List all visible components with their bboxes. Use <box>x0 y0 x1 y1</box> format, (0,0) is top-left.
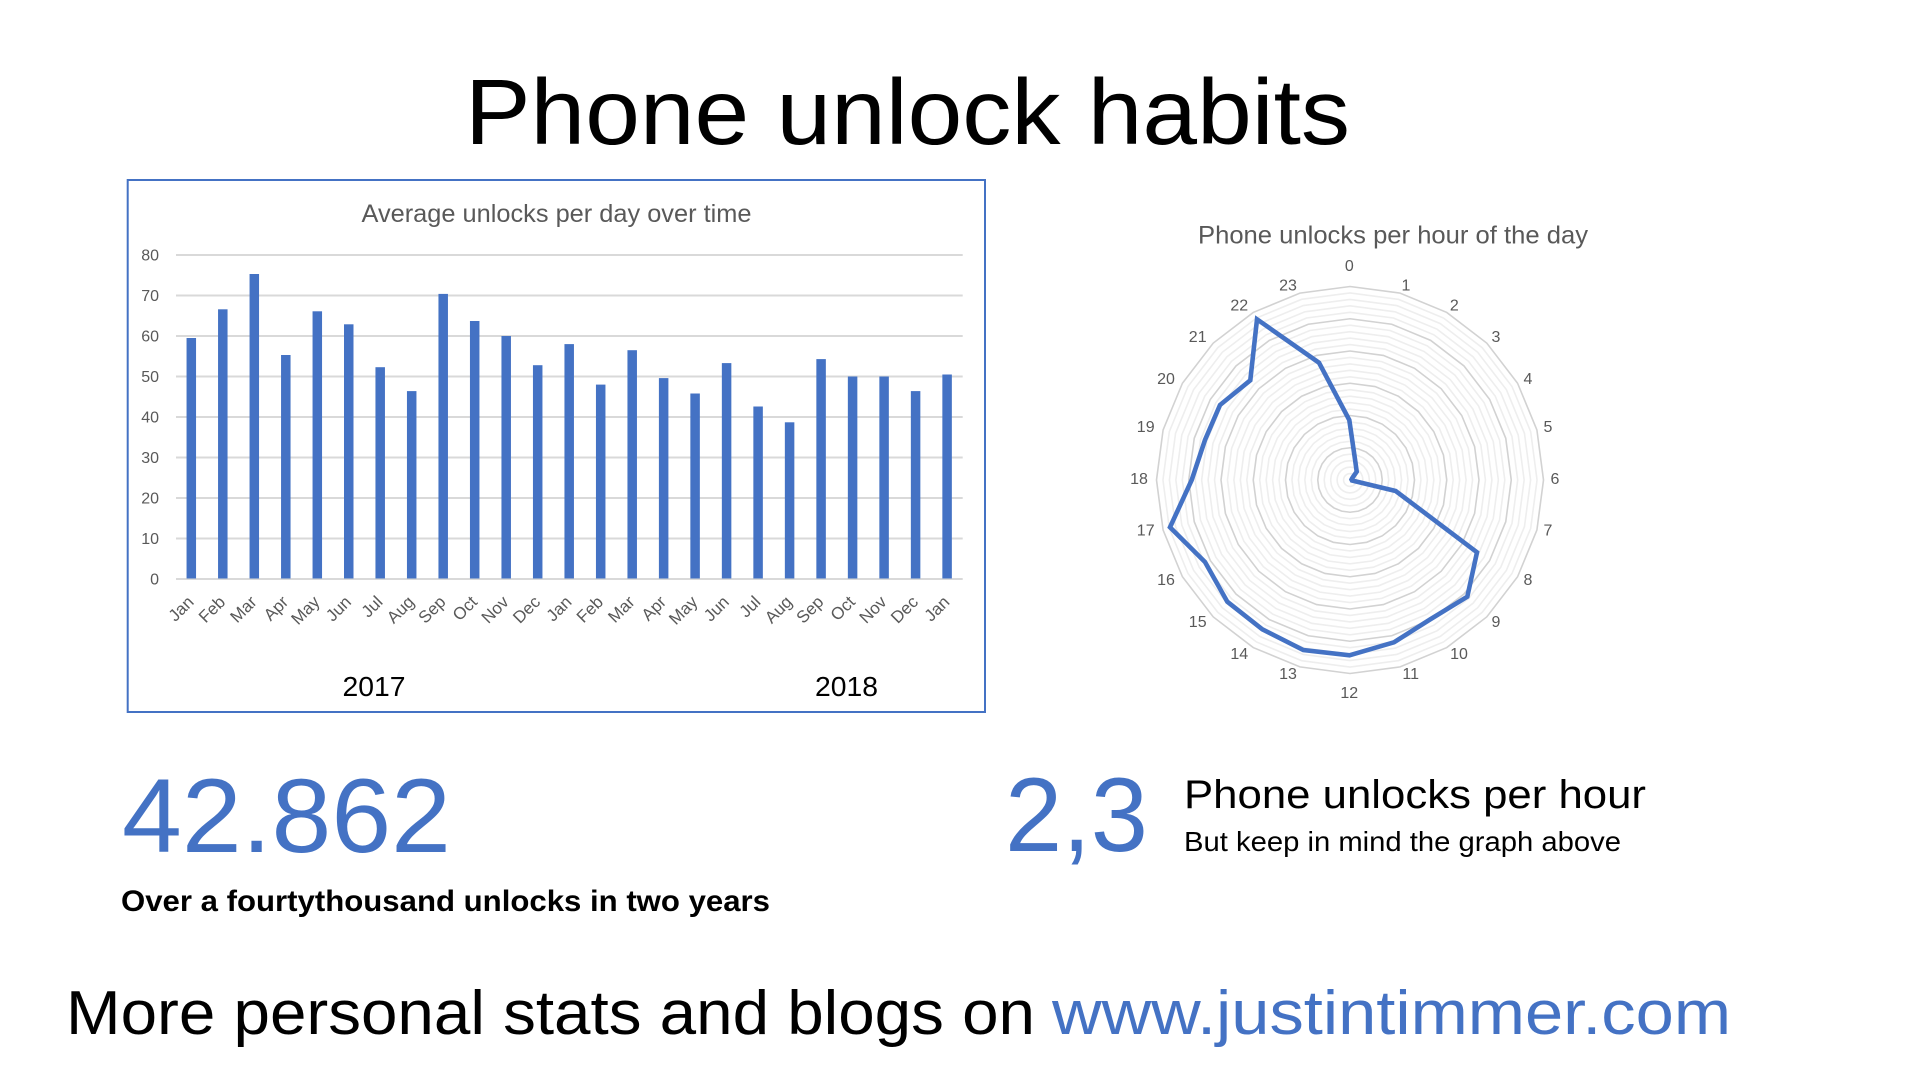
panel: average unlocks per day bar chart <box>128 180 985 712</box>
month labels: Sep <box>793 592 827 627</box>
big stat: total unlocks <box>121 758 770 918</box>
hour labels: 21 <box>1189 329 1207 346</box>
month labels: May <box>665 592 702 629</box>
month labels: Jan <box>165 592 198 625</box>
footer call to action <box>66 979 1731 1048</box>
y axis labels: 0 <box>150 572 159 588</box>
month labels: Nov <box>856 592 891 627</box>
month labels: Jan <box>921 592 953 625</box>
monthly bars <box>187 274 952 578</box>
month labels: Aug <box>761 592 796 627</box>
month labels: Dec <box>509 592 544 627</box>
month labels: Feb <box>195 592 229 627</box>
hour labels: 22 <box>1230 298 1248 314</box>
month labels: Nov <box>478 592 513 627</box>
hour labels: 8 <box>1524 572 1533 589</box>
radar rings <box>1156 286 1544 674</box>
hour labels: 19 <box>1137 419 1155 436</box>
month labels: Feb <box>573 592 607 627</box>
number 42.862: 42.862 <box>122 758 451 875</box>
y axis labels: 10 <box>141 531 159 548</box>
radar data line <box>1170 319 1477 655</box>
month labels: Mar <box>604 592 639 627</box>
hour labels: 3 <box>1492 329 1501 346</box>
hour labels: 17 <box>1137 522 1155 540</box>
footer text: More personal stats and blogs on <box>66 979 1035 1048</box>
hour labels: 6 <box>1551 471 1560 488</box>
y axis labels: 50 <box>141 369 159 386</box>
month labels: May <box>287 592 324 629</box>
hour labels: 16 <box>1157 572 1175 589</box>
month labels: Dec <box>887 592 922 627</box>
chart title: Average unlocks per day over time <box>362 200 752 228</box>
month labels: Jul <box>736 592 764 621</box>
y axis labels: 30 <box>141 450 159 467</box>
hour labels: 4 <box>1524 371 1533 388</box>
panel: phone unlocks per hour radar chart <box>1130 222 1589 702</box>
month labels: Jan <box>543 592 576 625</box>
hour labels: 20 <box>1157 371 1175 388</box>
hour labels: 9 <box>1492 614 1501 631</box>
hour labels: 12 <box>1340 685 1358 702</box>
hour labels: 23 <box>1279 278 1297 294</box>
month labels: Apr <box>260 592 292 625</box>
hour labels <box>1130 258 1560 702</box>
month labels <box>165 592 953 629</box>
y axis labels: 20 <box>141 490 159 508</box>
hour labels: 14 <box>1230 646 1248 663</box>
big stat: unlocks per hour <box>1005 757 1646 874</box>
number 2,3: 2,3 <box>1005 757 1148 874</box>
y axis labels: 60 <box>141 328 159 346</box>
month labels: Sep <box>415 592 450 627</box>
y axis labels: 70 <box>141 288 159 305</box>
stat note: But keep in mind the graph above <box>1184 826 1621 857</box>
hour labels: 5 <box>1544 419 1553 436</box>
stat heading: Phone unlocks per hour <box>1184 773 1646 817</box>
footer website: www.justintimmer.com <box>1051 979 1731 1048</box>
radar chart title: Phone unlocks per hour of the day <box>1198 222 1589 250</box>
hour labels: 1 <box>1402 278 1411 294</box>
month labels: Jun <box>700 592 733 625</box>
y axis labels <box>141 248 159 588</box>
hour labels: 11 <box>1402 666 1419 683</box>
hour labels: 0 <box>1345 258 1354 275</box>
month labels: Oct <box>827 592 859 625</box>
hour labels: 15 <box>1189 614 1207 631</box>
panel frame <box>128 180 985 712</box>
y axis labels: 80 <box>141 248 159 264</box>
month labels: Jul <box>358 592 387 621</box>
month labels: Aug <box>383 592 418 627</box>
hour labels: 2 <box>1450 298 1459 314</box>
y axis labels: 40 <box>141 410 159 426</box>
month labels: Jun <box>322 592 355 625</box>
y axis gridlines <box>176 255 963 579</box>
hour labels: 10 <box>1450 646 1468 663</box>
hour labels: 7 <box>1544 522 1553 540</box>
month labels: Apr <box>638 592 670 625</box>
hour labels: 18 <box>1130 471 1148 488</box>
year label 2017: 2017 <box>342 671 406 702</box>
hour labels: 13 <box>1279 666 1297 683</box>
title: Phone unlock habits <box>465 60 1350 164</box>
stat caption: Over a fourtythousand unlocks in two years <box>121 885 770 918</box>
month labels: Oct <box>449 592 481 625</box>
month labels: Mar <box>226 592 261 627</box>
year label 2018: 2018 <box>815 671 878 702</box>
